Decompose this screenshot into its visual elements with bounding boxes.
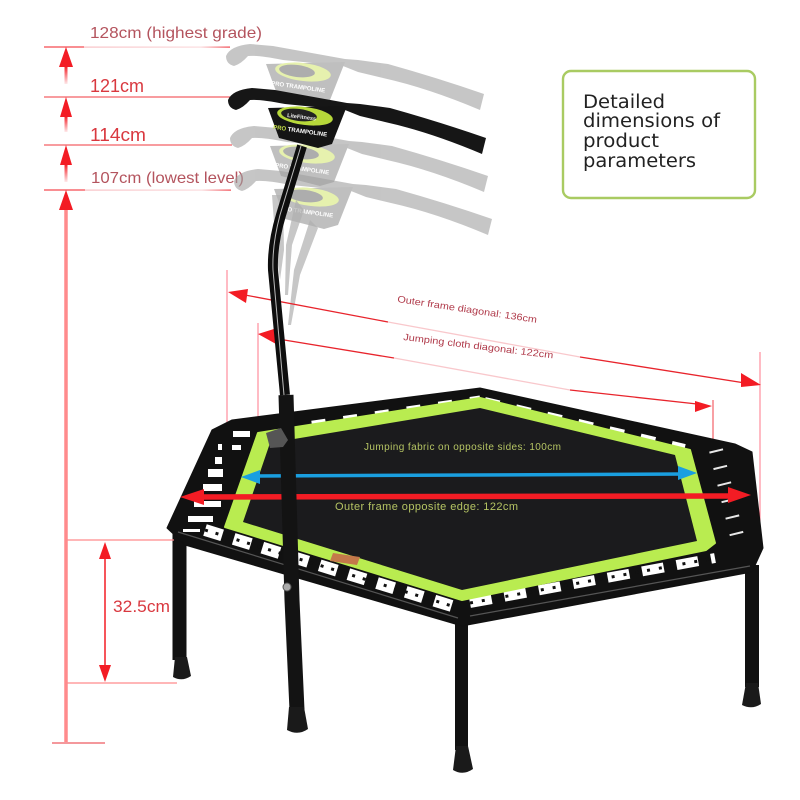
callout: detailed dimensions: dimensions of — [583, 111, 721, 132]
ghost handle: highest — [226, 44, 484, 110]
leg: middle — [453, 620, 473, 773]
pole bolt — [283, 583, 291, 591]
label: 32.5cm: 32.5cm — [113, 597, 170, 616]
jumping mat: green border — [225, 398, 715, 600]
trampoline frame and bands — [167, 388, 763, 626]
label: jumping cloth diagonal: Jumping cloth diagonal: 122cm — [403, 332, 554, 361]
ghost handle: lowest: PRO TRAMPOLINE — [279, 206, 333, 220]
callout: detailed dimensions — [563, 71, 755, 198]
height label: 107cm: 107cm (lowest level) — [91, 170, 244, 187]
height label: 114cm: 114cm — [90, 125, 146, 145]
fabric label: opposite sides: Jumping fabric on opposite sides: 100cm — [364, 442, 561, 453]
ghost handle: highest: PRO TRAMPOLINE — [271, 81, 325, 95]
leg height dimension — [66, 540, 177, 683]
handle: black highlighted — [228, 88, 486, 154]
height scale: lines and arrows — [44, 46, 232, 743]
red arrow: 122cm — [180, 487, 751, 505]
blue arrow: 100cm — [241, 466, 697, 484]
label: outer frame diagonal: Outer frame diagonal: 136cm — [397, 294, 538, 326]
height label: 128cm: 128cm (highest grade) — [90, 25, 262, 42]
handle: black highlighted: LiteFitness — [287, 113, 316, 123]
jumping mat: black fabric — [243, 408, 697, 590]
ghost handle: middle — [230, 126, 488, 192]
orange label on mat — [330, 553, 360, 565]
fabric label: opposite edge: Outer frame opposite edge: 122cm — [335, 501, 518, 513]
ghost pole traces — [272, 195, 318, 325]
ghost handle: lowest — [234, 169, 492, 235]
callout: detailed dimensions: Detailed — [583, 92, 665, 113]
ghost handle: middle: PRO TRAMPOLINE — [275, 163, 329, 177]
height label: 121cm: 121cm — [90, 76, 144, 96]
leg: left — [172, 530, 191, 679]
handle: black highlighted: PRO TRAMPOLINE — [273, 125, 327, 139]
diagonal dimension: jumping cloth — [258, 323, 713, 535]
callout: detailed dimensions: product — [583, 131, 659, 152]
pole — [273, 146, 308, 733]
diagonal dimension: outer frame — [227, 270, 761, 545]
callout: detailed dimensions: parameters — [583, 151, 696, 172]
pole clamp — [266, 428, 288, 448]
leg: right — [742, 565, 761, 707]
